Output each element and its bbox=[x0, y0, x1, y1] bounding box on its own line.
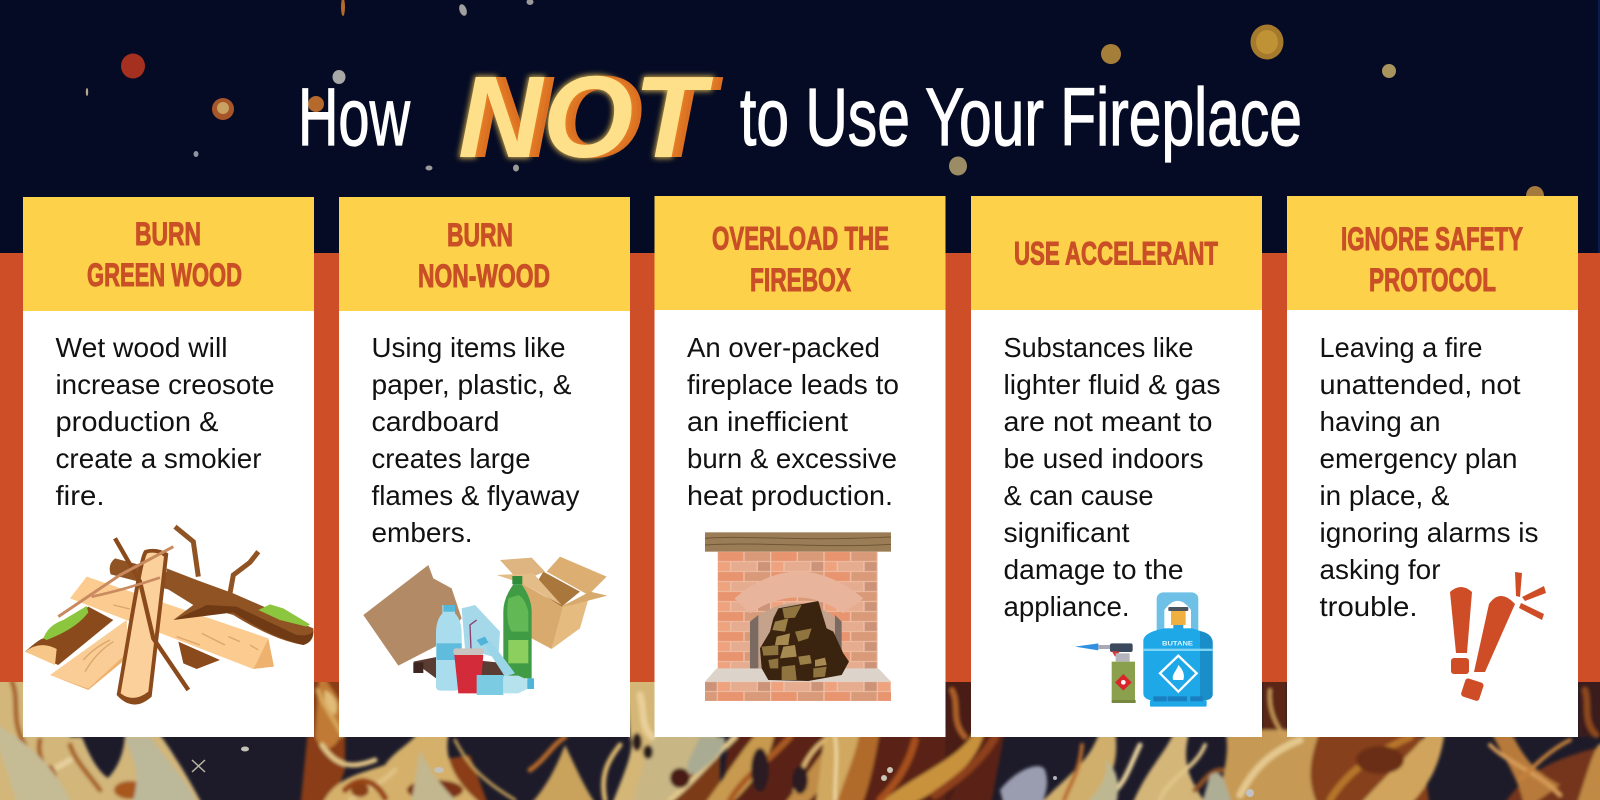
body text bbox=[56, 332, 274, 511]
body text: cardboard bbox=[372, 406, 500, 437]
dark pockets bbox=[632, 733, 642, 751]
heading: BURN bbox=[135, 216, 201, 252]
body text: trouble. bbox=[1320, 591, 1418, 622]
body text: asking for bbox=[1320, 554, 1440, 585]
body text bbox=[1004, 332, 1220, 622]
title word: How: How bbox=[298, 72, 411, 163]
heading: FIREBOX bbox=[750, 262, 851, 298]
orange band bbox=[0, 253, 1600, 682]
heading: USE ACCELERANT bbox=[1014, 236, 1218, 272]
body text: be used indoors bbox=[1004, 443, 1204, 474]
pale highlights bbox=[125, 737, 200, 800]
flames strip bbox=[0, 670, 1600, 800]
floating embers bbox=[86, 0, 1544, 206]
body text: ignoring alarms is bbox=[1320, 517, 1538, 548]
body text: fire. bbox=[56, 480, 104, 511]
icon: double exclamation marks bbox=[1450, 572, 1546, 702]
icon: butane tank and torch bbox=[1075, 592, 1213, 707]
body text: embers. bbox=[372, 517, 472, 548]
body text bbox=[372, 332, 580, 548]
icon: paper, plastic and cardboard trash bbox=[363, 557, 607, 695]
brown under layer bbox=[300, 670, 490, 800]
heading bbox=[1341, 221, 1523, 298]
body text: are not meant to bbox=[1004, 406, 1212, 437]
body text: paper, plastic, & bbox=[372, 369, 572, 400]
body text: an inefficient bbox=[687, 406, 848, 437]
body text: having an bbox=[1320, 406, 1440, 437]
heading: OVERLOAD THE bbox=[712, 220, 889, 256]
title word: NOT: NOT bbox=[468, 52, 724, 182]
body text: Wet wood will bbox=[56, 332, 227, 363]
body text: Using items like bbox=[372, 332, 566, 363]
body text: fireplace leads to bbox=[687, 369, 899, 400]
heading: NON-WOOD bbox=[418, 258, 550, 294]
body text: in place, & bbox=[1320, 480, 1450, 511]
heading: GREEN WOOD bbox=[87, 257, 242, 293]
body text: increase creosote bbox=[56, 369, 274, 400]
body text: production & bbox=[56, 406, 218, 437]
body text: damage to the bbox=[1004, 554, 1184, 585]
title word: NOT: NOT bbox=[458, 52, 714, 182]
body text: & can cause bbox=[1004, 480, 1154, 511]
heading: IGNORE SAFETY bbox=[1341, 221, 1523, 257]
tan flames bbox=[0, 682, 202, 800]
body text: lighter fluid & gas bbox=[1004, 369, 1220, 400]
body text: emergency plan bbox=[1320, 443, 1518, 474]
heading bbox=[87, 216, 242, 293]
body text: An over-packed bbox=[687, 332, 880, 363]
body text: appliance. bbox=[1004, 591, 1130, 622]
panel: use accelerant bbox=[971, 196, 1262, 737]
title word: NOT: NOT bbox=[464, 52, 720, 182]
title bbox=[298, 52, 1302, 182]
heading: BURN bbox=[447, 217, 513, 253]
panel: burn non-wood bbox=[339, 197, 630, 737]
flame streaks bbox=[12, 682, 1596, 800]
icon: brick fireplace stuffed with logs bbox=[705, 532, 891, 701]
body text: unattended, not bbox=[1320, 369, 1521, 400]
title words: to Use Your Fireplace: to Use Your Fireplace bbox=[740, 72, 1302, 163]
body text: burn & excessive bbox=[687, 443, 897, 474]
small sparks bbox=[241, 746, 249, 752]
heading: PROTOCOL bbox=[1369, 262, 1496, 298]
body text: create a smokier bbox=[56, 443, 262, 474]
title word: NOT: NOT bbox=[460, 52, 716, 182]
body text: Substances like bbox=[1004, 332, 1194, 363]
icon: butane tank and torch: BUTANE bbox=[1162, 641, 1194, 648]
panel: burn green wood bbox=[23, 197, 314, 737]
body text: creates large bbox=[372, 443, 530, 474]
heading bbox=[418, 217, 550, 294]
body text: Leaving a fire bbox=[1320, 332, 1482, 363]
panel: overload the firebox bbox=[654, 196, 946, 737]
night background bbox=[0, 0, 1600, 253]
body text bbox=[1320, 332, 1538, 622]
heading bbox=[712, 220, 889, 298]
panel: ignore safety protocol bbox=[1287, 196, 1578, 737]
body text: significant bbox=[1004, 517, 1130, 548]
icon: stack of green wood bbox=[25, 527, 314, 705]
body text: heat production. bbox=[687, 480, 893, 511]
body text bbox=[687, 332, 899, 511]
body text: flames & flyaway bbox=[372, 480, 580, 511]
title word: NOT: NOT bbox=[458, 52, 714, 182]
